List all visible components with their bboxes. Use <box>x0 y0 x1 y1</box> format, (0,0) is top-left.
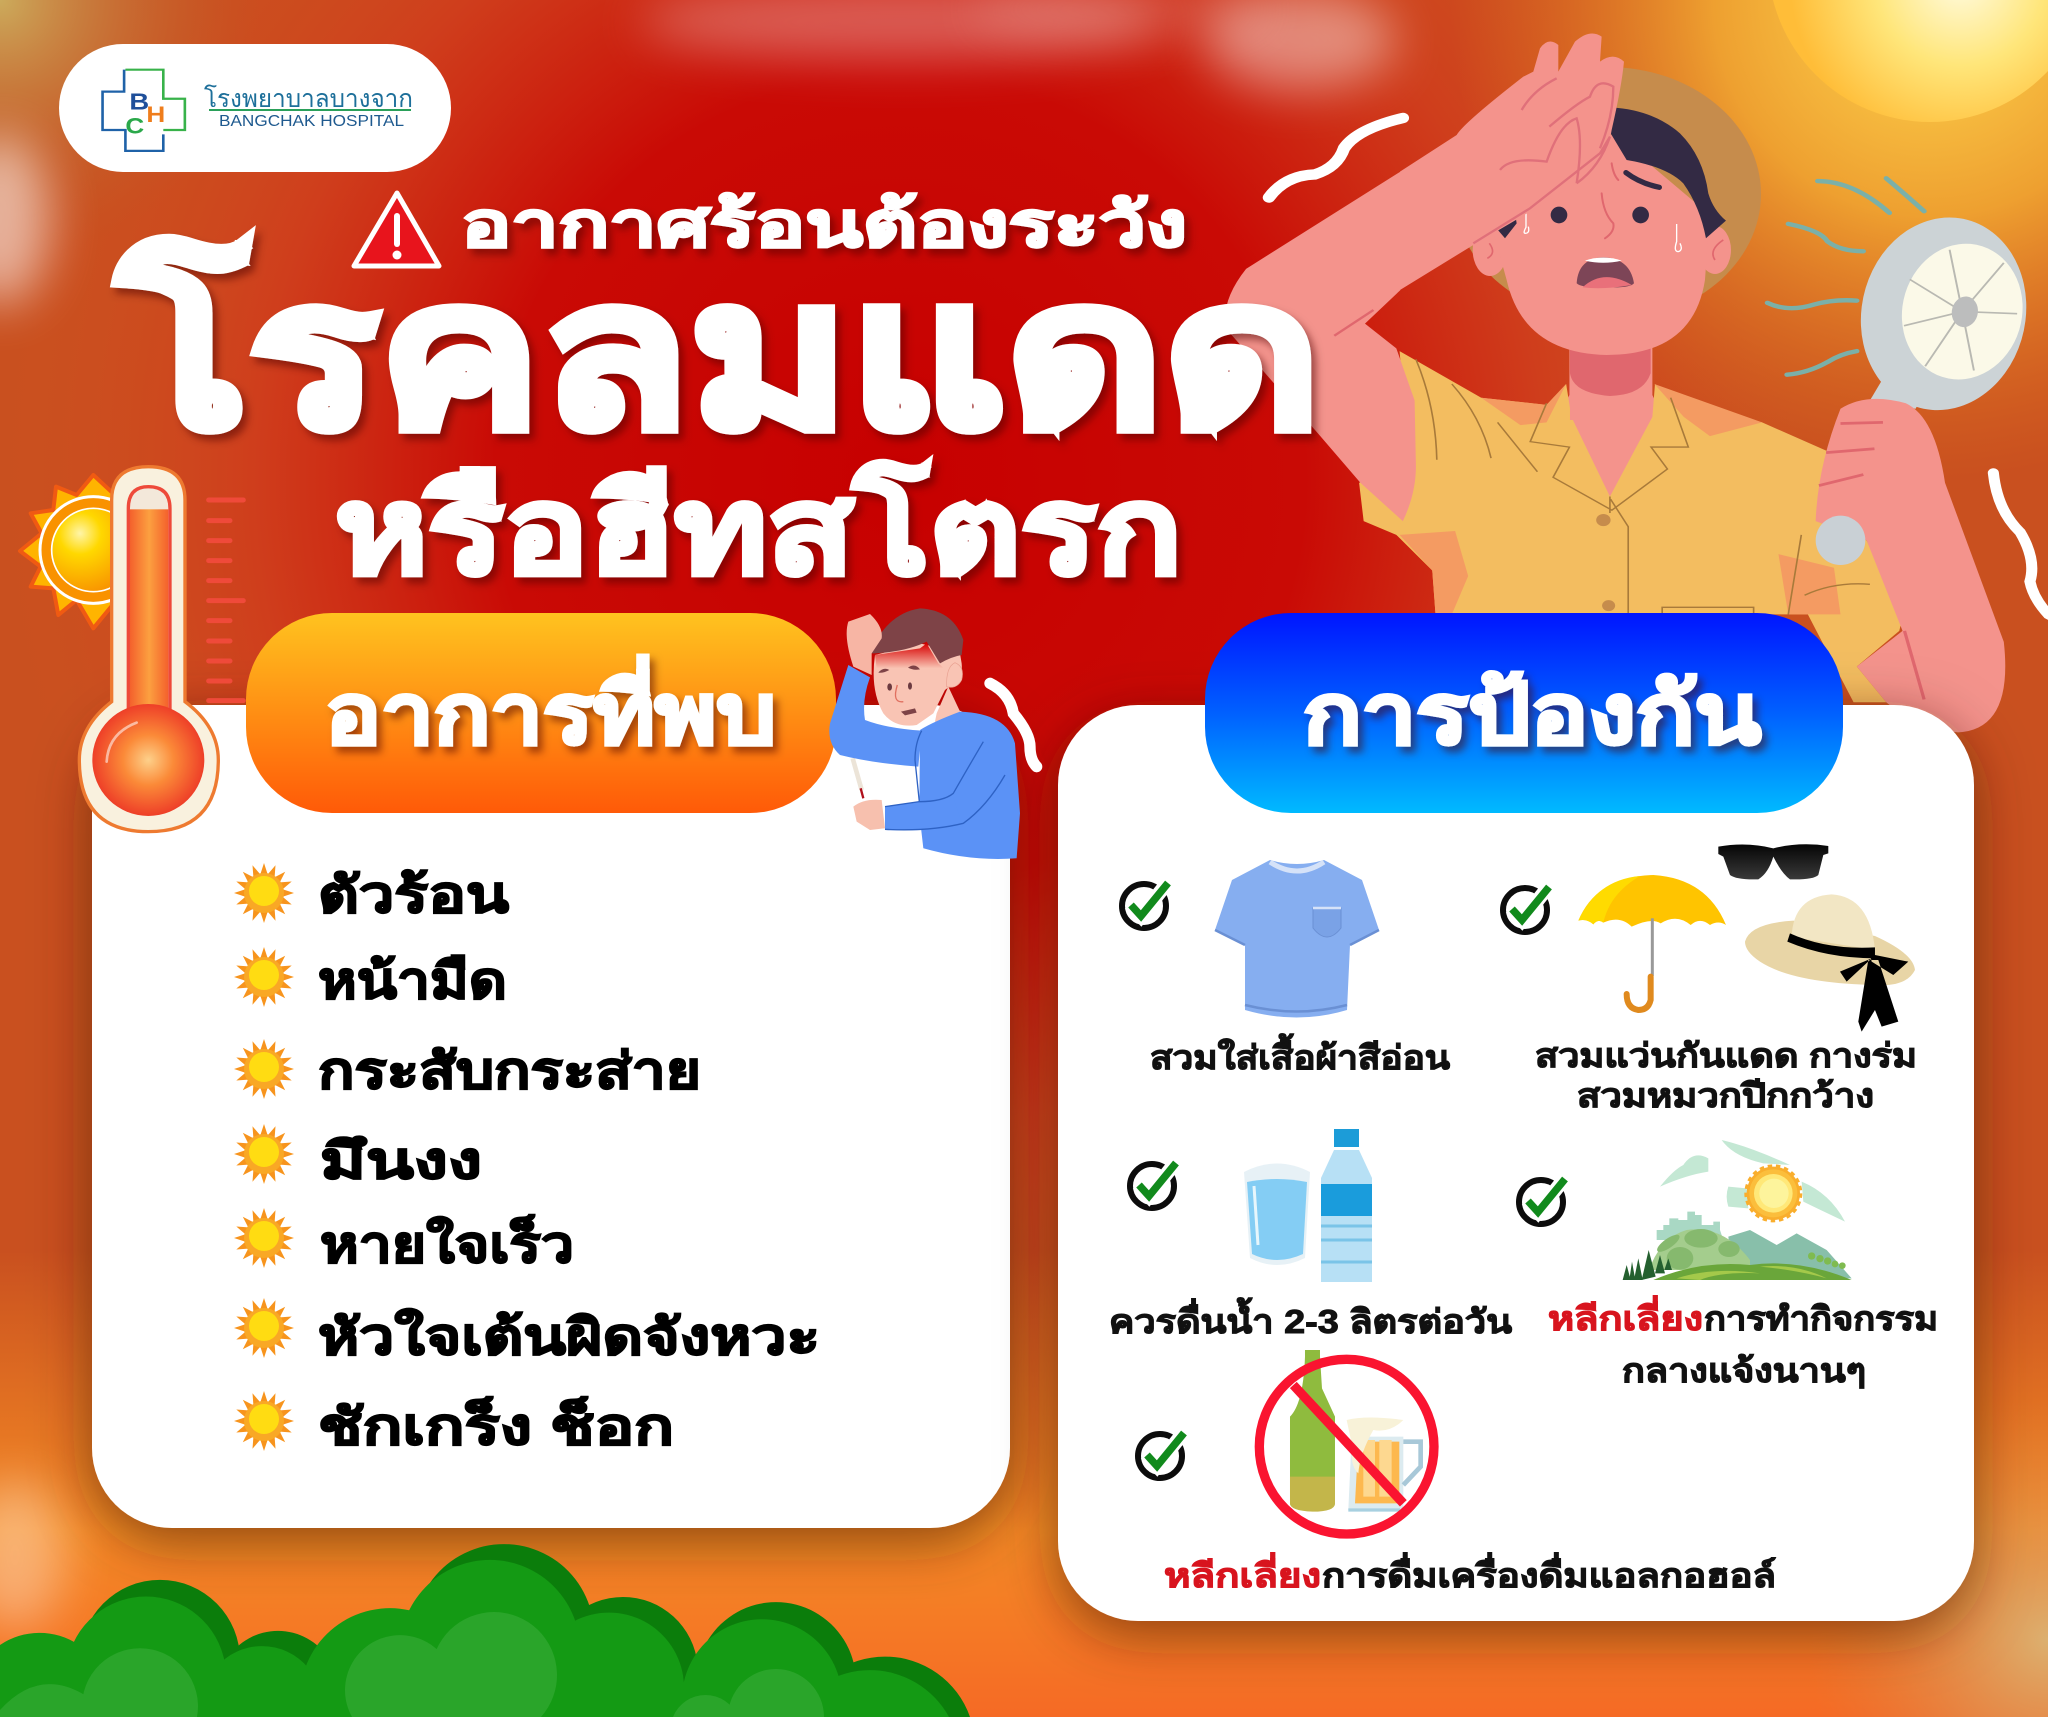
bushes <box>0 1544 970 1717</box>
fan handle <box>1870 371 1924 409</box>
eyes <box>1551 207 1567 223</box>
face details <box>878 666 920 715</box>
icon: t-shirt <box>1215 860 1379 1018</box>
logo mark: B <box>129 90 149 115</box>
wind lines <box>1767 178 1924 375</box>
symptom 1 <box>234 863 509 923</box>
caption: outdoor long time: กลางแจ้งนานๆ <box>1622 1352 1866 1389</box>
thermometer with sun <box>20 467 243 832</box>
raised arm <box>1225 172 1416 521</box>
main title: โรคลมแดด <box>116 236 1321 470</box>
heading pill: symptoms <box>246 613 836 813</box>
symptom 6: หัวใจเต้นผิดจังหวะ <box>318 1308 820 1365</box>
icon: water bottle <box>1321 1129 1372 1282</box>
sweat stains on shirt <box>1400 384 1840 614</box>
big sun top right <box>1768 0 2048 122</box>
logo text: โรงพยาบาลบางจาก <box>204 84 413 113</box>
logo mark <box>103 70 185 151</box>
logo mark: H <box>146 103 165 127</box>
icon: glass of water <box>1244 1164 1310 1265</box>
warning triangle icon <box>354 193 439 266</box>
thermometer tube <box>79 467 218 832</box>
symptom 1: ตัวร้อน <box>318 867 509 923</box>
symptom 4 <box>234 1124 482 1189</box>
symptom 2 <box>234 947 507 1009</box>
subtitle: อากาศร้อนต้องระวัง <box>461 191 1187 260</box>
shirt <box>1359 351 1903 702</box>
symptom 3 <box>234 1039 701 1099</box>
fan knob <box>1816 516 1865 565</box>
brow <box>1626 173 1659 187</box>
chest <box>1553 346 1667 499</box>
hat behind head <box>1455 67 1761 321</box>
nose <box>1602 163 1618 238</box>
ear <box>947 663 962 687</box>
symptom 5 <box>234 1208 574 1273</box>
symptom 7 <box>234 1391 674 1455</box>
caption: avoid alcohol red: หลีกเลี่ยง <box>1164 1552 1321 1594</box>
neck <box>1570 340 1651 420</box>
thermometer stick <box>853 758 862 790</box>
illustration: overheated man with hand fan <box>1225 33 2048 732</box>
heading pill: symptoms: อาการที่พบ <box>325 655 776 761</box>
hand <box>1400 33 1624 290</box>
neck <box>935 687 962 724</box>
sweater <box>829 665 1020 859</box>
caption: sun protection line 2: สวมหมวกปีกกว้าง <box>1577 1077 1874 1114</box>
symptom 5: หายใจเร็ว <box>320 1214 574 1273</box>
heading pill: prevention <box>1205 613 1843 813</box>
hair <box>870 608 963 663</box>
main bush <box>0 1560 949 1717</box>
heading pill: prevention: การป้องกัน <box>1303 667 1761 761</box>
caption: drink water: ควรดื่นน้ำ 2-3 ลิตรต่อวัน <box>1109 1297 1512 1340</box>
head and hand <box>1400 33 1731 420</box>
mouth <box>1577 257 1634 287</box>
icon: no alcohol <box>1259 1350 1434 1534</box>
thermometer ticks <box>209 500 243 701</box>
icon: umbrella <box>1578 875 1726 1010</box>
symptom 3: กระสับกระส่าย <box>318 1043 701 1099</box>
symptom 7: ชักเกร็ง ช็อก <box>318 1396 674 1455</box>
caption: avoid outdoor activity red: หลีกเลี่ยง <box>1548 1295 1703 1337</box>
dark bush tops <box>80 1544 970 1717</box>
symptom 6 <box>234 1298 820 1365</box>
head <box>874 643 962 726</box>
check marks <box>1122 882 1565 1478</box>
symptom 2: หน้ามืด <box>318 953 507 1009</box>
icon: sun hat <box>1745 894 1915 1032</box>
logo pill: BANGCHAK HOSPITAL <box>219 113 404 130</box>
secondary title: หรือฮีทสโตรก <box>335 460 1182 599</box>
panel: symptoms <box>92 705 1010 1528</box>
ears <box>1473 224 1507 276</box>
heat squiggles <box>1269 118 1403 197</box>
icon: sunglasses <box>1718 844 1828 879</box>
logo pill <box>59 44 451 172</box>
caption: avoid outdoor activity: การทำกิจกรรม <box>1704 1300 1938 1337</box>
logo mark: C <box>125 114 144 139</box>
forearm and fist <box>1816 399 2005 732</box>
lighter bush leaves <box>0 1612 824 1717</box>
sun behind thermometer <box>20 475 147 628</box>
icon: landscape with sun <box>1623 1140 1852 1280</box>
sweat drops <box>1524 213 1681 252</box>
panel: prevention <box>1058 705 1974 1621</box>
red forehead <box>875 643 944 668</box>
symptom 4: มึนงง <box>320 1133 482 1189</box>
raised hand <box>847 614 882 675</box>
caption: light clothes: สวมใส่เสื้อผ้าสีอ่อน <box>1150 1033 1450 1076</box>
lower hand <box>853 800 885 830</box>
caption: avoid alcohol: การดื่มเครื่องดื่มแอลกอฮอล์ <box>1322 1552 1776 1594</box>
white squiggle <box>990 683 1037 767</box>
hair <box>1495 107 1726 238</box>
caption: sun protection line 1: สวมแว่นกันแดด กางร่ม <box>1535 1037 1917 1074</box>
illustration: sick man with thermometer <box>829 608 1037 859</box>
hand fan <box>1850 211 2037 417</box>
body and right arm <box>1225 118 2048 732</box>
face <box>1490 133 1708 355</box>
